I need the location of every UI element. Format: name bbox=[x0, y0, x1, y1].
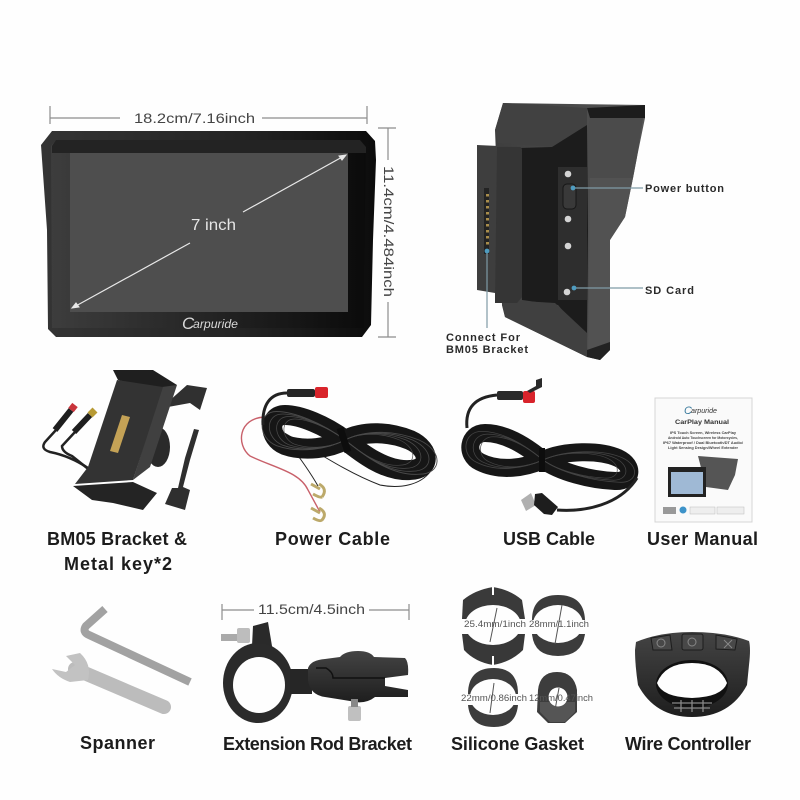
label: user manual: User Manual bbox=[647, 529, 758, 549]
gasket size lines bbox=[490, 605, 562, 713]
panel: user manual bbox=[655, 398, 752, 522]
manual description: IPS Touch Screen, Wireless CarPlay bbox=[670, 431, 736, 435]
label: silicone gasket: Silicone Gasket bbox=[451, 734, 584, 754]
cradle base bbox=[73, 482, 157, 510]
dimension: height: 11.4cm/4.484inch bbox=[381, 166, 397, 297]
logo bbox=[182, 314, 238, 333]
ball arm bbox=[308, 651, 408, 702]
callout: power button: Power button bbox=[645, 183, 724, 195]
dimension line bbox=[222, 601, 409, 620]
wires with plugs bbox=[43, 405, 95, 472]
plate screws bbox=[564, 171, 571, 295]
hex key bbox=[85, 609, 190, 682]
label: wire controller: Wire Controller bbox=[625, 734, 751, 754]
coil of cable bbox=[262, 412, 437, 474]
waterproof connector bbox=[497, 378, 542, 403]
dimension: width bbox=[50, 106, 367, 126]
USB plug bbox=[521, 493, 558, 515]
gasket size labels: 25.4mm/1inch bbox=[464, 619, 526, 630]
panel: USB cable bbox=[466, 378, 637, 515]
ring terminals bbox=[311, 484, 324, 521]
callout: connector: BM05 Bracket bbox=[446, 344, 528, 356]
coil of cable bbox=[466, 431, 635, 482]
lower side panel bbox=[588, 178, 633, 360]
cradle face bbox=[75, 380, 163, 484]
manual title: CarPlay Manual bbox=[675, 419, 729, 426]
rear housing bbox=[495, 103, 645, 360]
cradle top tabs bbox=[113, 370, 177, 392]
inner grille bbox=[672, 700, 712, 712]
manual description: Light Sensing Design/Wheel Extender bbox=[668, 446, 739, 450]
dimension: width: 18.2cm/7.16inch bbox=[134, 110, 255, 126]
logo: arpuride bbox=[193, 319, 238, 331]
label: USB cable: USB Cable bbox=[503, 529, 595, 549]
panel: rear view of monitor bbox=[446, 103, 724, 360]
button plate bbox=[558, 167, 587, 300]
clamp ring bbox=[223, 643, 293, 723]
manual description: IP67 Waterproof / Dual Bluetooth/DT Audio/ bbox=[663, 441, 743, 445]
ball mount bbox=[146, 427, 170, 467]
dimension line: 11.5cm/4.5inch bbox=[258, 601, 365, 617]
button icons bbox=[657, 638, 732, 648]
monitor screen bbox=[70, 153, 348, 312]
hood top face bbox=[495, 103, 587, 147]
label: BM05 bracket bbox=[47, 529, 187, 574]
logo: C bbox=[182, 314, 195, 333]
screen size label: 7 inch bbox=[191, 217, 236, 234]
clamp bolt bbox=[221, 628, 250, 643]
controller body bbox=[635, 632, 750, 717]
label: extension rod bracket: Extension Rod Bracket bbox=[223, 734, 412, 754]
open-end spanner bbox=[52, 653, 164, 707]
pogo pins bbox=[110, 415, 130, 453]
arm neck bbox=[290, 669, 312, 694]
gasket size labels: 28mm/1.1inch bbox=[529, 619, 589, 630]
diagonal arrow bbox=[72, 155, 346, 308]
gasket 25.4mm bbox=[462, 585, 525, 666]
manual badges bbox=[663, 506, 744, 514]
lower rear panel bbox=[502, 300, 587, 357]
gasket size labels: 22mm/0.86inch bbox=[461, 693, 527, 704]
gasket 12mm bbox=[537, 672, 577, 723]
manual logo: arpuride bbox=[691, 408, 717, 415]
lower bolt bbox=[348, 699, 361, 721]
panel: power cable bbox=[241, 387, 437, 521]
mount hole bbox=[656, 660, 728, 708]
clamp ears bbox=[245, 622, 280, 660]
power plug bbox=[287, 387, 328, 398]
sun hood top bbox=[587, 105, 645, 118]
black thin wire bbox=[273, 427, 430, 486]
label: BM05 bracket: Metal key*2 bbox=[64, 554, 172, 574]
panel: extension rod bracket bbox=[221, 601, 409, 723]
manual logo: C bbox=[684, 405, 692, 417]
lead to USB bbox=[557, 478, 637, 510]
panel: wire controller bbox=[635, 632, 750, 717]
panel: silicone gaskets bbox=[461, 585, 593, 727]
callout: power button bbox=[571, 183, 724, 195]
panel: spanner tools bbox=[52, 609, 190, 707]
plug lead bbox=[263, 393, 287, 425]
label: spanner: Spanner bbox=[80, 733, 155, 753]
metal key bbox=[165, 429, 199, 510]
manual device images bbox=[668, 456, 738, 497]
buttons bbox=[651, 634, 737, 650]
pin contacts bbox=[484, 188, 489, 254]
callout: connector bbox=[446, 249, 528, 356]
monitor glass bbox=[51, 140, 366, 328]
panel: BM05 bracket bbox=[43, 370, 207, 510]
red wire bbox=[241, 417, 320, 512]
cradle side strip bbox=[133, 385, 177, 480]
bracket connector plate bbox=[477, 145, 522, 303]
callout: SD card: SD Card bbox=[645, 285, 694, 297]
panel: front view of monitor bbox=[41, 106, 397, 337]
lead to plug bbox=[467, 395, 497, 428]
gasket 28mm bbox=[532, 595, 585, 656]
sun hood side bbox=[587, 118, 643, 178]
rear clip bbox=[168, 385, 207, 410]
callout: connector: Connect For bbox=[446, 332, 521, 344]
manual page bbox=[655, 398, 752, 522]
callout: SD card bbox=[572, 285, 694, 297]
inner recess bbox=[520, 125, 588, 340]
manual logo bbox=[684, 405, 717, 417]
monitor body bbox=[41, 131, 376, 337]
manual description: Android Auto Touchscreen for Motorcycles, bbox=[668, 436, 738, 440]
gasket 22mm bbox=[468, 668, 518, 727]
power button bbox=[563, 184, 576, 209]
gasket size labels bbox=[461, 619, 593, 704]
dimension: height bbox=[378, 128, 397, 337]
gasket size labels: 12mm/0.47inch bbox=[529, 693, 593, 704]
label: BM05 bracket: BM05 Bracket & bbox=[47, 529, 187, 549]
manual description bbox=[663, 431, 743, 450]
label: power cable: Power Cable bbox=[275, 529, 390, 549]
